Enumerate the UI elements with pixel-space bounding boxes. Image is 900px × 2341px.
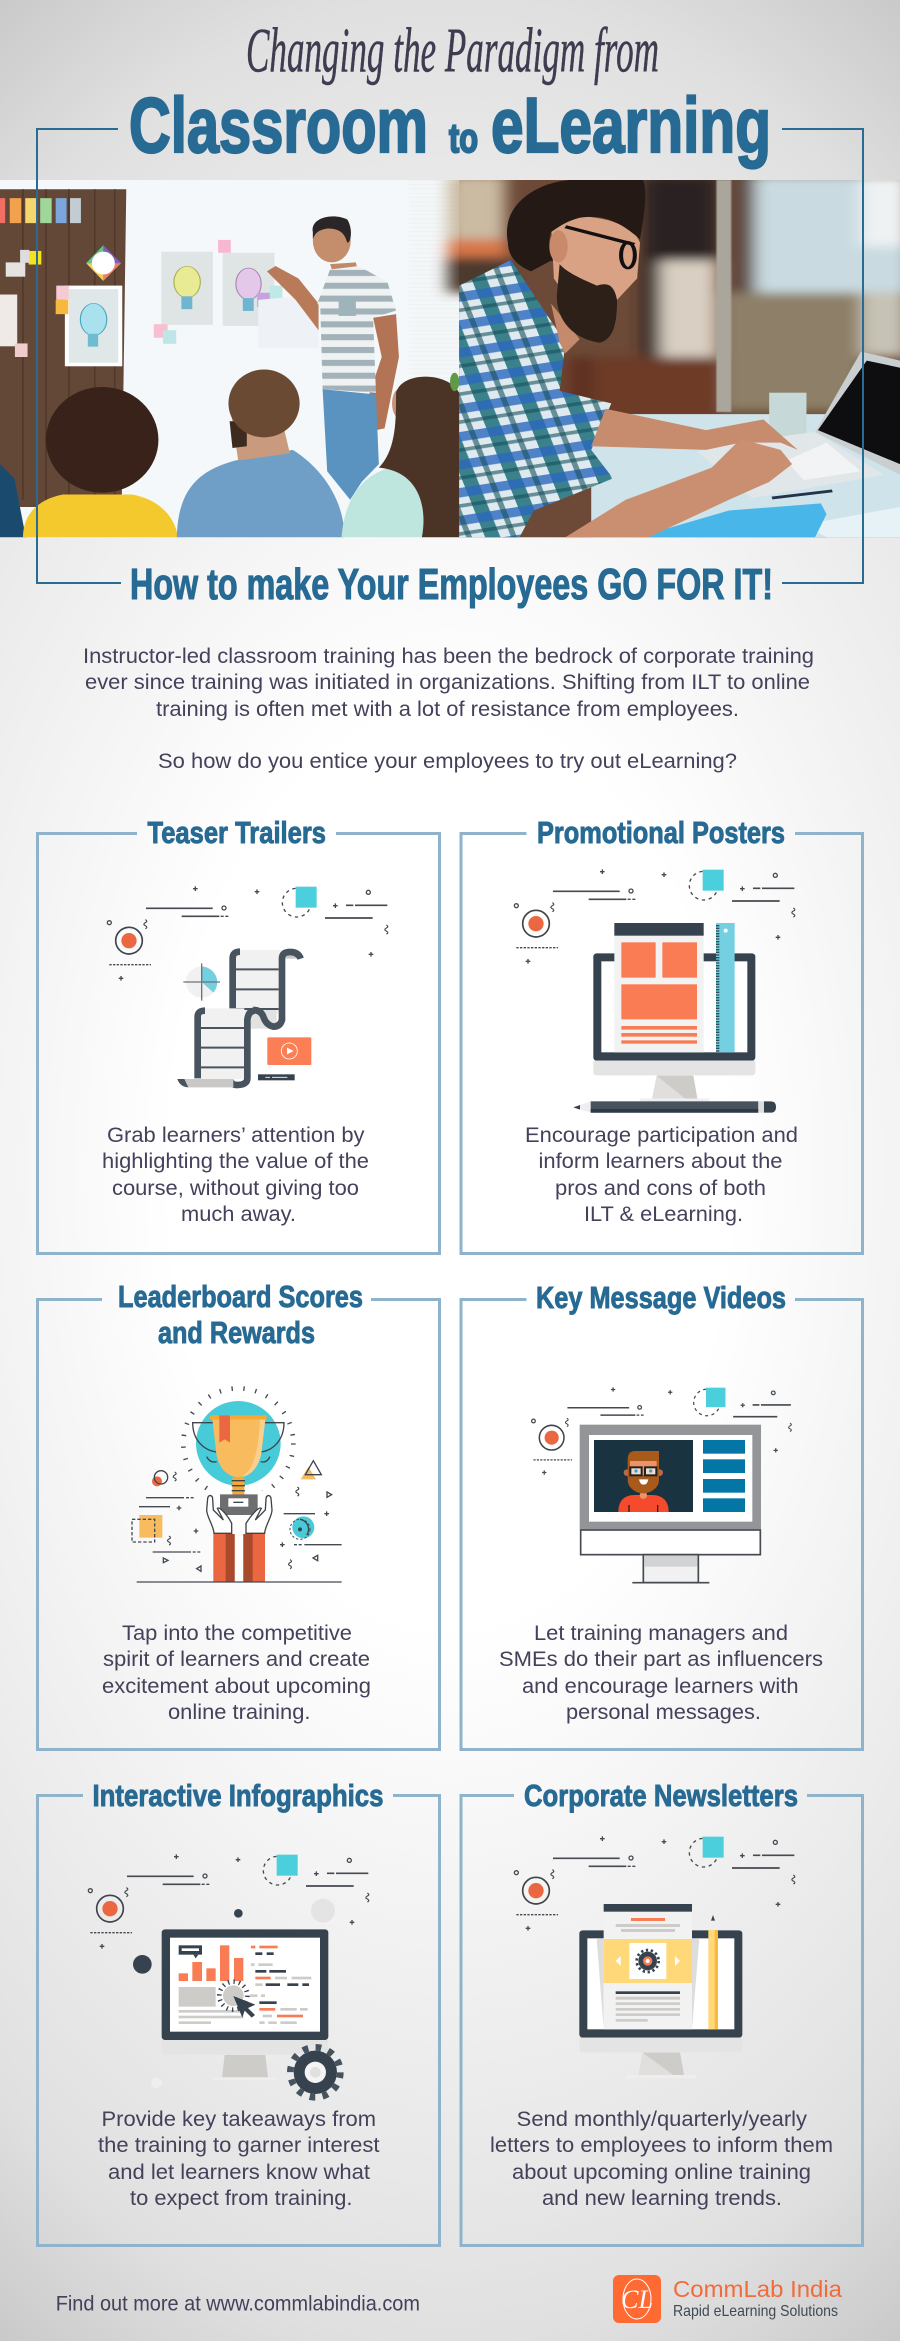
heading: Leaderboard Scores and Rewards [118, 1279, 363, 1350]
heading: Corporate Newsletters: Corporate Newsletters [524, 1778, 798, 1813]
body text: pros and cons of both [555, 1176, 766, 1200]
body text: letters to employees to inform them [490, 2133, 833, 2157]
heading: Teaser Trailers: Teaser Trailers [148, 815, 326, 850]
heading: Leaderboard Scores and Rewards: Leaderboard Scores [118, 1279, 363, 1314]
icon: infographic on monitor with gear [88, 1854, 369, 2097]
title: main heading: eLearning [491, 81, 771, 169]
body text: and let learners know what [108, 2160, 370, 2184]
title: main heading [129, 81, 771, 169]
icon: poster on monitor [514, 869, 795, 1113]
panel: Corporate Newsletters [461, 1778, 862, 2246]
body text: Tap into the competitive [122, 1621, 352, 1645]
title: main heading: Classroom [129, 81, 428, 169]
body text: Provide key takeaways from [102, 2107, 376, 2131]
logo: CommLab India [613, 2275, 842, 2323]
body text: SMEs do their part as influencers [499, 1647, 823, 1671]
icon: trophy held by hands [132, 1388, 342, 1582]
body text [490, 2107, 833, 2210]
intro paragraph [83, 644, 814, 773]
panel: Interactive Infographics [38, 1778, 440, 2246]
body text: highlighting the value of the [102, 1149, 369, 1173]
body text: Encourage participation and [525, 1123, 798, 1147]
body text: online training. [168, 1700, 310, 1724]
body text: spirit of learners and create [103, 1647, 370, 1671]
body text [499, 1621, 823, 1724]
logo tagline: Rapid eLearning Solutions [673, 2303, 838, 2320]
icon: CL logo mark [613, 2275, 661, 2323]
body text: to expect from training. [130, 2186, 352, 2210]
panel: Teaser Trailers [38, 815, 440, 1254]
body text: the training to garner interest [98, 2133, 380, 2157]
heading: Key Message Videos: Key Message Videos [536, 1280, 786, 1315]
body text [102, 1621, 371, 1724]
photo strip [0, 175, 900, 537]
body text: Send monthly/quarterly/yearly [517, 2107, 807, 2131]
panel: Key Message Videos [461, 1280, 862, 1750]
panel: Promotional Posters [461, 815, 862, 1254]
body text: inform learners about the [538, 1149, 782, 1173]
body text: ILT & eLearning. [584, 1202, 743, 1226]
panel: Leaderboard Scores and Rewards [38, 1279, 440, 1750]
body text: course, without giving too [112, 1176, 359, 1200]
photo: classroom presenter and audience [0, 180, 459, 537]
body text: and encourage learners with [522, 1674, 798, 1698]
body text: much away. [181, 1202, 296, 1226]
intro paragraph: Instructor-led classroom training has been the bedrock of corporate training [83, 644, 814, 668]
intro paragraph: So how do you entice your employees to try out eLearning? [158, 749, 737, 773]
heading: Promotional Posters: Promotional Posters [537, 815, 785, 850]
title frame lines [37, 129, 863, 583]
body text: personal messages. [566, 1700, 761, 1724]
heading: Leaderboard Scores and Rewards: and Rewards [158, 1315, 315, 1350]
icon: CL logo mark: CL [621, 2285, 653, 2314]
logo wordmark: CommLab India [673, 2276, 842, 2302]
title: main heading: to [449, 115, 478, 161]
icon: video on monitor [532, 1387, 791, 1583]
footer link text: Find out more at www.commlabindia.com [56, 2292, 420, 2316]
body text [98, 2107, 380, 2210]
icon: newsletter on monitor [514, 1836, 795, 2078]
heading: Interactive Infographics: Interactive Infographics [92, 1778, 384, 1813]
photo: man typing on laptop [448, 175, 900, 537]
body text: Let training managers and [534, 1621, 788, 1645]
body text [525, 1123, 798, 1226]
intro paragraph: training is often met with a lot of resistance from employees. [156, 697, 739, 721]
body text [102, 1123, 369, 1226]
icon: film scroll [107, 886, 388, 1087]
body text: about upcoming online training [512, 2160, 811, 2184]
intro paragraph: ever since training was initiated in organizations. Shifting from ILT to online [85, 670, 810, 694]
body text: excitement about upcoming [102, 1674, 371, 1698]
body text: Grab learners’ attention by [107, 1123, 365, 1147]
body text: and new learning trends. [542, 2186, 782, 2210]
